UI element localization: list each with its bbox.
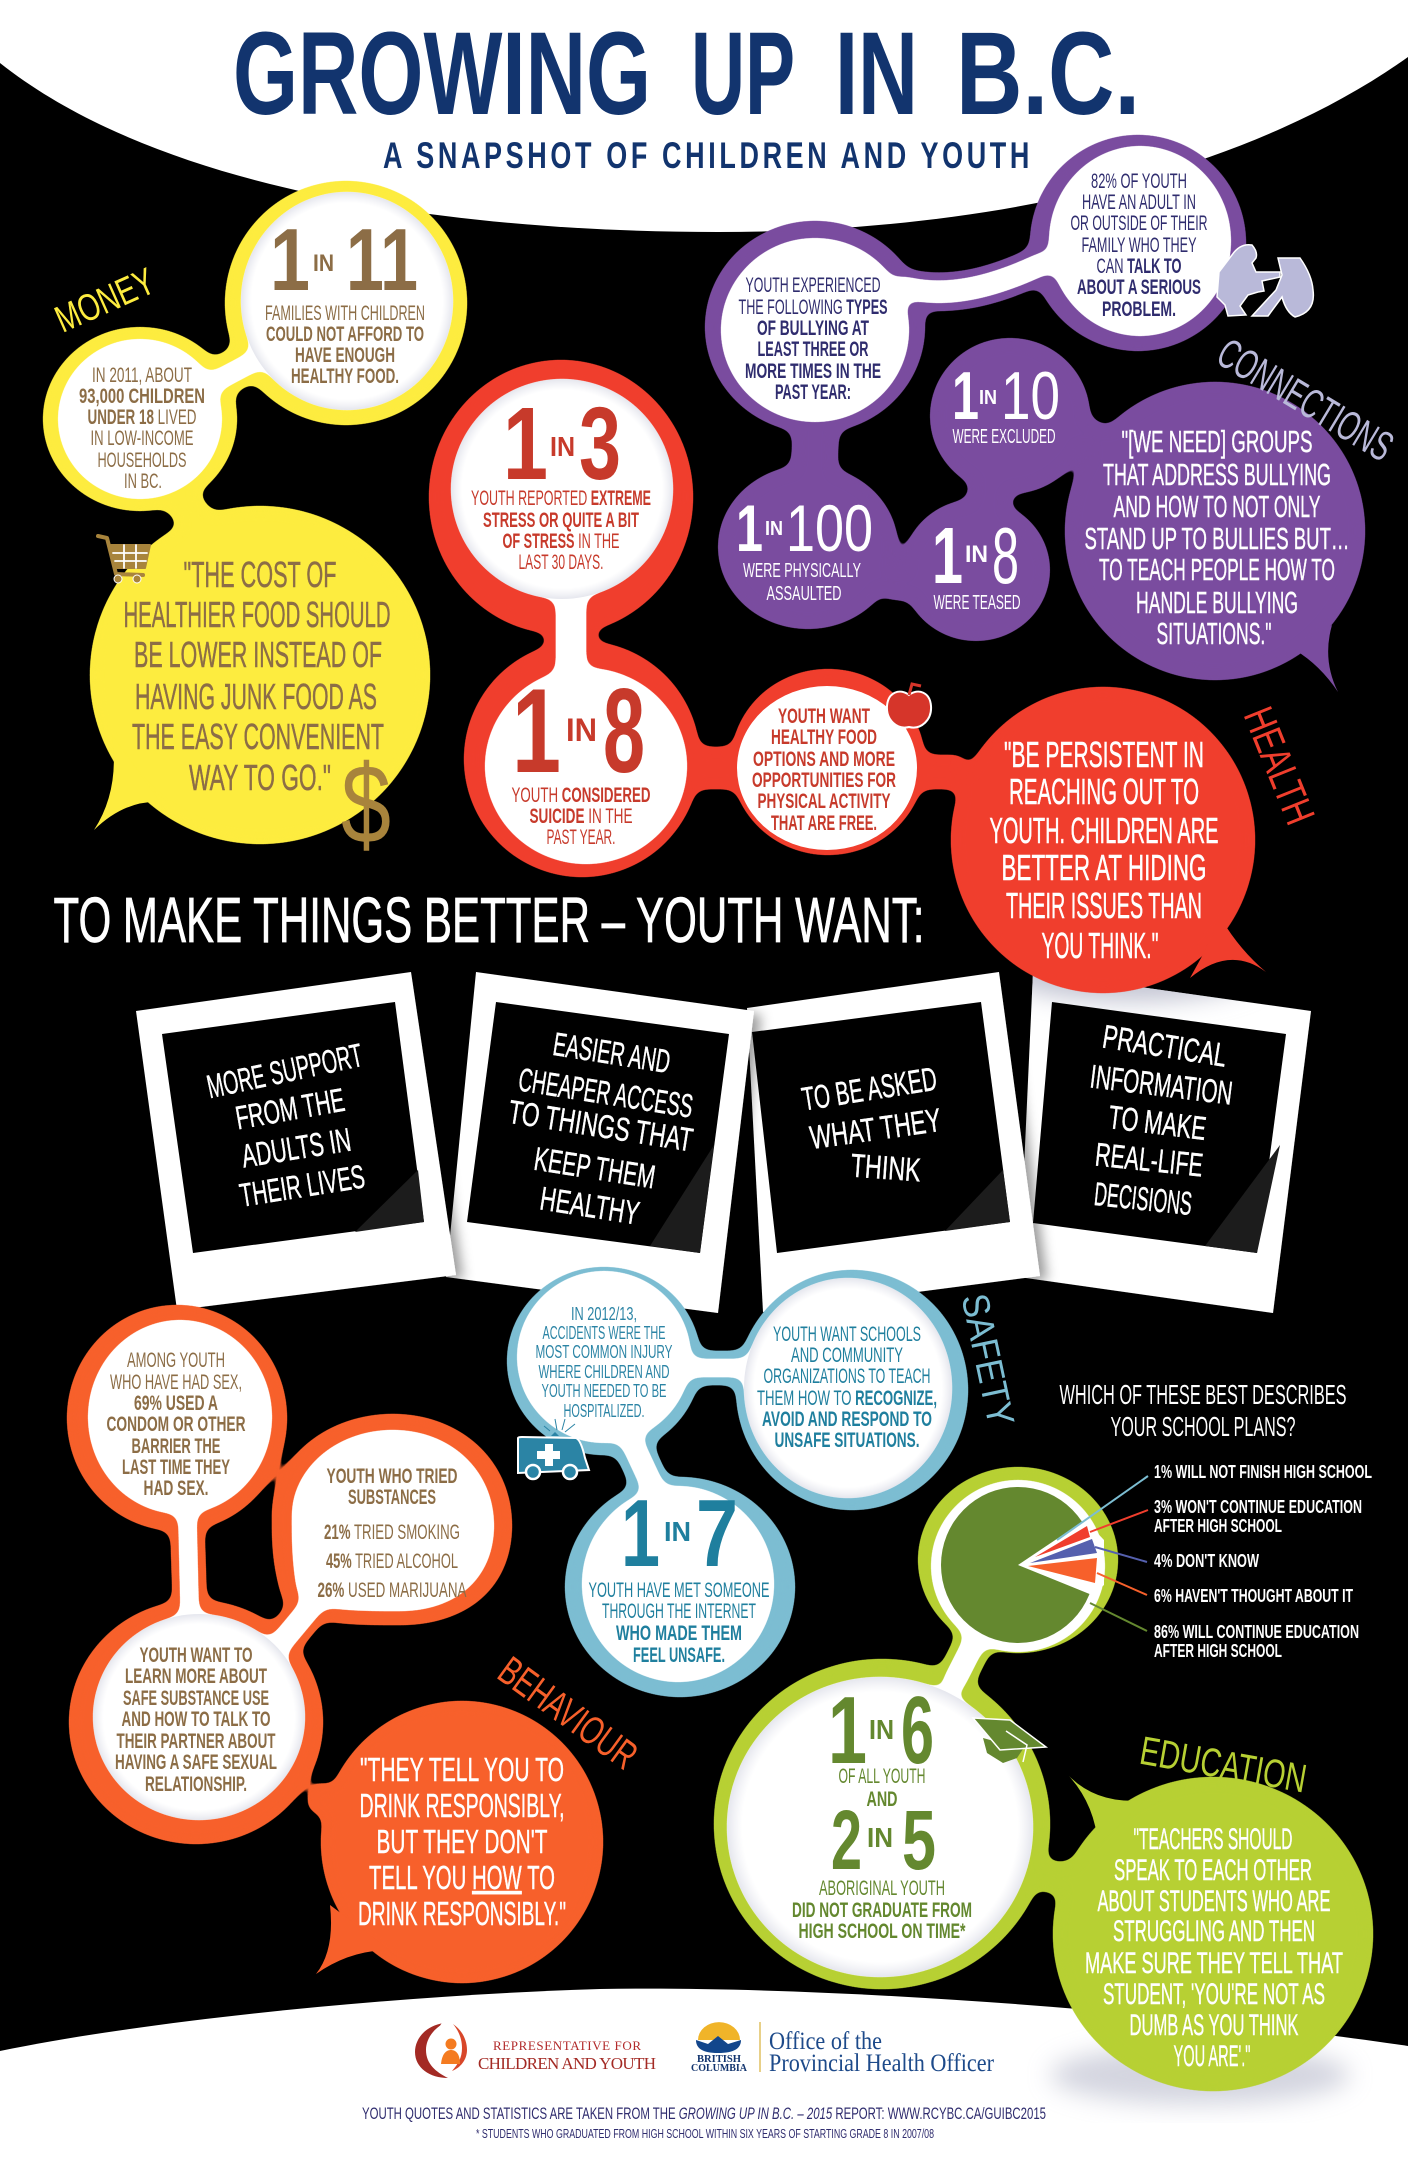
logo: representative for children and youth: REPRESENTATIVE FOR [493,2038,641,2053]
polaroid 2: CHEAPER ACCESS [516,1061,696,1125]
title: GROWING [233,8,651,140]
polaroid 4: REAL-LIFE [1094,1136,1205,1184]
money bubble base [43,181,467,844]
safety bubble base [507,1267,968,1697]
text: youth want healthy food: OPTIONS AND MORE [753,748,895,771]
stat: 1 in 100 assaulted: 100 [786,491,873,565]
behaviour label: BEHAVIOUR [490,1649,645,1778]
text: 93,000 children [79,364,205,493]
text: 82% of youth: PROBLEM. [1102,298,1176,321]
text: safe substance use: YOUTH WANT TO [140,1644,252,1667]
stat: 1 in 7: 1 [621,1480,660,1587]
text: safe substance use: RELATIONSHIP. [145,1773,247,1796]
text: condom use: AMONG YOUTH [127,1349,225,1372]
heading: to make things better: TO MAKE THINGS BETTER – YOUTH WANT: [54,884,924,956]
text: schools and community: AND COMMUNITY [791,1344,903,1367]
stat: 1 in 8 teased: 8 [992,511,1019,600]
icon: shopping cart [98,536,150,583]
stat: 1 in 8 teased: 1 [932,511,963,600]
stat: 1 in 6 and 2 in 5: OF ALL YOUTH [838,1765,926,1788]
text: types of bullying: YOUTH EXPERIENCED [746,274,880,297]
stat: 1 in 11: FAMILIES WITH CHILDREN [265,302,425,325]
polaroid 1: FROM THE [233,1081,347,1136]
text: schools and community: UNSAFE SITUATIONS. [774,1429,920,1452]
logo: representative for children and youth: CHILDREN AND YOUTH [478,2054,656,2073]
text: schools and community: AVOID AND RESPOND TO [762,1408,932,1431]
connections quote tail [1295,625,1338,692]
text: condom use: WHO HAVE HAD SEX, [110,1371,242,1394]
polaroid 2: TO THINGS THAT [506,1093,696,1158]
panel: health bubbles [429,360,1324,993]
stat: 1 in 8 suicide: 1 [512,664,561,798]
stat: 1 in 100 assaulted: WERE PHYSICALLY [743,560,861,582]
education bubble base [714,1467,1373,2091]
text: types of bullying: LEAST THREE OR [758,338,868,361]
panel: connections [705,135,1402,692]
panel: safety [507,1267,1021,1697]
pie chart: school plans [941,1476,1148,1643]
text: substances: SUBSTANCES [348,1486,436,1509]
stat: 1 in 10 excluded: IN [979,387,997,409]
stat: 1 in 11: COULD NOT AFFORD TO [266,323,424,346]
text: 93,000 children: 93,000 CHILDREN [79,385,205,408]
text: 82% of youth: HAVE AN ADULT IN [1082,191,1196,214]
stat: 1 in 8 suicide: IN [566,712,597,748]
stat: 1 in 6 and 2 in 5 [792,1677,972,1943]
text: 93,000 children: IN LOW-INCOME [90,427,194,450]
stat: 1 in 8 suicide [512,664,650,849]
stat: 1 in 6 and 2 in 5: DID NOT GRADUATE FROM [792,1899,972,1922]
text: 93,000 children: HOUSEHOLDS [98,449,186,472]
polaroid 4: DECISIONS [1093,1175,1194,1222]
text: accidents [536,1304,672,1421]
text: accidents: WHERE CHILDREN AND [538,1362,670,1382]
behaviour quote text: "THEY TELL YOU TO [360,1751,564,1788]
health quote text: THEIR ISSUES THAN [1006,885,1202,926]
text: accidents: IN 2012/13, [571,1304,637,1324]
behaviour quote text: TELL YOU HOW TO [369,1859,555,1896]
stat: 1 in 6 and 2 in 5: AND [866,1788,898,1811]
text: types of bullying [738,274,888,404]
text: condom use [106,1349,246,1500]
logo: representative for children and youth [415,2022,656,2078]
polaroid 1: MORE SUPPORT [203,1036,366,1105]
stat: 1 in 3: LAST 30 DAYS. [518,551,604,574]
stat: 1 in 11: 11 [346,210,418,309]
title [233,8,1140,140]
text: condom use: CONDOM OR OTHER [106,1413,246,1436]
stat: 1 in 11: 1 [270,210,310,309]
health quote text: YOUTH. CHILDREN ARE [990,810,1218,851]
icon: dollar sign: $ [341,742,391,867]
stat: 1 in 11 [265,210,425,388]
polaroid 4: INFORMATION [1088,1058,1235,1112]
text: condom use: HAD SEX. [144,1477,208,1500]
panel: education [714,1379,1373,2105]
stat: 1 in 3: 1 [503,386,548,501]
white circle: youth want [737,686,917,850]
health quote text: REACHING OUT TO [1009,771,1199,812]
icon: ambulance [518,1419,589,1479]
text: condom use: LAST TIME THEY [122,1456,230,1479]
stat: 1 in 7: THROUGH THE INTERNET [602,1600,756,1623]
text: types of bullying: OF BULLYING AT [757,317,869,340]
stat: 1 in 8 suicide: YOUTH CONSIDERED [512,784,650,807]
behaviour white circles [88,1320,494,1820]
text: 82% of youth: ABOUT A SERIOUS [1077,276,1201,299]
polaroid 2: EASIER AND [551,1025,673,1080]
polaroid 4: PRACTICAL [1100,1018,1229,1074]
polaroid 2: HEALTHY [538,1180,642,1232]
polaroid 4: TO MAKE [1107,1098,1208,1147]
stat: 1 in 3: YOUTH REPORTED EXTREME [471,487,651,510]
behaviour quote text: DRINK RESPONSIBLY, [360,1787,564,1824]
panel: behaviour [67,1305,645,1983]
stat: 1 in 100 assaulted: ASSAULTED [766,583,842,605]
stat: 1 in 6 and 2 in 5: ABORIGINAL YOUTH [819,1877,945,1900]
money quote text: BE LOWER INSTEAD OF [134,634,382,675]
text: youth want healthy food: HEALTHY FOOD [771,726,877,749]
stat: 1 in 11: IN [313,250,334,277]
logo: british columbia: BRITISH [697,2053,741,2065]
logo: british columbia [691,2022,747,2074]
stat: 1 in 100 assaulted: IN [765,518,783,540]
safety label: SAFETY [953,1290,1021,1430]
money quote tail [94,735,160,830]
stat: 1 in 7: YOUTH HAVE MET SOMEONE [588,1579,770,1602]
health quote tail [1190,920,1266,978]
connections quote text [1084,424,1350,651]
footer source note: YOUTH QUOTES AND STATISTICS ARE TAKEN FROM THE GROWING UP IN B.C. – 2015 REPORT: WWW.RCYBC.CA/GUIBC2015 [362,2104,1046,2123]
header white arc [0,0,1408,232]
connections bubble base [705,135,1365,680]
stat: 1 in 7: WHO MADE THEM [616,1622,742,1645]
stat: 1 in 10 excluded: 10 [1001,358,1060,434]
education label: EDUCATION [1137,1729,1310,1801]
stat: 1 in 10 excluded: WERE EXCLUDED [952,426,1056,448]
health quote text: YOU THINK." [1042,925,1158,966]
behaviour quote text: DRINK RESPONSIBLY." [358,1895,566,1932]
health quote text: "BE PERSISTENT IN [1004,734,1204,775]
text: safe substance use: AND HOW TO TALK TO [122,1708,270,1731]
stat: 1 in 6 and 2 in 5: 6 [901,1677,934,1784]
chart legend: AFTER HIGH SCHOOL [1154,1641,1282,1661]
text: accidents: HOSPITALIZED. [564,1401,644,1421]
text: 93,000 children: IN 2011, ABOUT [92,364,192,387]
text: types of bullying: MORE TIMES IN THE [745,360,881,383]
logo: office of the provincial health officer [760,2022,995,2077]
stat: 1 in 7: FEEL UNSAFE. [633,1644,725,1667]
polaroid 1: THEIR LIVES [237,1158,367,1214]
text: 82% of youth: FAMILY WHO THEY [1082,234,1196,257]
money quote text: HEALTHIER FOOD SHOULD [124,594,390,635]
text: substances [318,1465,466,1602]
title: UP [691,8,795,140]
text: types of bullying: THE FOLLOWING TYPES [738,296,888,319]
logo: office of the provincial health officer: Office of the [769,2028,882,2055]
education white circles [727,1480,1105,1977]
polaroid 4 [1024,976,1311,1313]
polaroid 1: ADULTS IN [239,1121,353,1175]
money quote text [124,554,390,798]
stat: 1 in 6 and 2 in 5: 1 [828,1677,867,1784]
stat: 1 in 10 excluded [952,358,1060,448]
text: accidents: MOST COMMON INJURY [536,1342,672,1362]
stat: 1 in 11: HEALTHY FOOD. [291,365,399,388]
health label: HEALTH [1235,700,1324,831]
text: 82% of youth: CAN TALK TO [1096,255,1182,278]
panel: polaroids [136,938,1311,1313]
icon: graduation cap [973,1718,1046,1763]
chart question [1060,1379,1346,1442]
subtitle: A SNAPSHOT OF CHILDREN AND YOUTH [383,135,1033,176]
stat: 1 in 6 and 2 in 5: 5 [902,1793,936,1887]
text: 82% of youth: 82% OF YOUTH [1091,170,1187,193]
stat: 1 in 7: IN [664,1516,691,1547]
health bubble base [429,360,1255,993]
text: schools and community [757,1323,937,1452]
shadow under education quote [1050,2045,1350,2105]
connections quote text: SITUATIONS." [1156,616,1272,651]
education quote text: YOU ARE'." [1174,2040,1250,2073]
stat: 1 in 8 suicide: PAST YEAR. [546,826,616,849]
stat: 1 in 8 teased [932,511,1020,614]
money quote text: HAVING JUNK FOOD AS [135,676,377,717]
icon: two people talking [1217,245,1313,317]
stat: 1 in 6 and 2 in 5: IN [867,1822,893,1853]
polaroid 3: THINK [850,1147,922,1188]
polaroid 3: WHAT THEY [807,1101,943,1156]
stat: 1 in 6 and 2 in 5: 2 [831,1793,862,1887]
text: types of bullying: PAST YEAR: [775,381,851,404]
stat: 1 in 100 assaulted: 1 [736,491,763,565]
connections white circles [721,146,1231,422]
panel: money [43,181,467,867]
polaroid 3: TO BE ASKED [799,1060,939,1118]
logo: office of the provincial health officer: Provincial Health Officer [769,2050,995,2077]
text: 82% of youth [1070,170,1208,321]
money white circles [58,192,453,499]
text: youth want healthy food: THAT ARE FREE. [771,812,877,835]
stat: 1 in 8 teased: IN [965,541,988,568]
stat: 1 in 11: HAVE ENOUGH [295,344,395,367]
education quote tail [1069,1776,1145,1845]
behaviour bubble base [67,1305,603,1983]
stat: 1 in 8 teased: WERE TEASED [934,592,1020,614]
chart legend [1154,1462,1372,1661]
polaroid 1 [136,972,456,1310]
stat: 1 in 3: OF STRESS IN THE [502,530,620,553]
text: substances: 26% USED MARIJUANA [318,1579,466,1602]
text: safe substance use [115,1644,277,1796]
polaroid 2: KEEP THEM [532,1140,658,1195]
money label: MONEY [49,261,161,341]
stat: 1 in 7: 7 [696,1480,738,1587]
health quote text: BETTER AT HIDING [1002,847,1206,888]
stat: 1 in 10 excluded: 1 [952,358,979,434]
text: safe substance use: HAVING A SAFE SEXUAL [115,1751,277,1774]
stat: 1 in 3: 3 [579,386,621,501]
footnote: * STUDENTS WHO GRADUATED FROM HIGH SCHOOL WITHIN SIX YEARS OF STARTING GRADE 8 IN 2007/08 [476,2126,934,2141]
text: safe substance use: SAFE SUBSTANCE USE [123,1687,269,1710]
text: youth want healthy food [752,705,896,835]
stat: 1 in 8 suicide: 8 [603,664,645,798]
text: schools and community: THEM HOW TO RECOGNIZE, [757,1387,937,1410]
text: substances: 45% TRIED ALCOHOL [326,1550,458,1573]
stat: 1 in 3: IN [550,431,575,462]
health white circles [451,379,687,864]
text: substances: 21% TRIED SMOKING [324,1521,460,1544]
text: youth want healthy food: OPPORTUNITIES FOR [752,769,896,792]
polaroid 3 [747,972,1040,1312]
money quote text: WAY TO GO." [189,757,331,798]
stat: 1 in 7 [588,1480,770,1667]
money quote text: THE EASY CONVENIENT [132,716,384,757]
footer white arc [0,1989,1408,2176]
education quote text [1085,1823,1343,2073]
stat: 1 in 6 and 2 in 5: HIGH SCHOOL ON TIME* [798,1920,966,1943]
title: IN [835,8,918,140]
title: B.C. [956,8,1140,140]
behaviour quote tail [316,1905,390,1974]
text: youth want healthy food: YOUTH WANT [778,705,870,728]
text: substances: YOUTH WHO TRIED [326,1465,458,1488]
text: 82% of youth: OR OUTSIDE OF THEIR [1070,212,1208,235]
stat: 1 in 3: STRESS OR QUITE A BIT [483,509,639,532]
text: 93,000 children: IN BC. [124,470,162,493]
health quote text [990,734,1218,966]
text: schools and community: YOUTH WANT SCHOOLS [773,1323,921,1346]
logo: british columbia: COLUMBIA [691,2062,747,2074]
text: condom use: BARRIER THE [132,1435,220,1458]
text: 93,000 children: UNDER 18 LIVED [88,406,196,429]
behaviour quote text: BUT THEY DON'T [376,1823,548,1860]
stat: 1 in 6 and 2 in 5: IN [869,1714,894,1745]
chart legend: 4% DON'T KNOW [1154,1551,1259,1571]
text: youth want healthy food: PHYSICAL ACTIVITY [758,790,890,813]
text: accidents: YOUTH NEEDED TO BE [542,1381,666,1401]
text: condom use: 69% USED A [134,1392,218,1415]
text: safe substance use: LEARN MORE ABOUT [125,1665,267,1688]
chart legend: AFTER HIGH SCHOOL [1154,1516,1282,1536]
stat: 1 in 3 [471,386,651,574]
polaroid 2 [446,972,754,1313]
icon: apple [887,684,931,728]
stat: 1 in 8 suicide: SUICIDE IN THE [530,805,632,828]
text: schools and community: ORGANIZATIONS TO TEACH [764,1365,930,1388]
text: safe substance use: THEIR PARTNER ABOUT [116,1730,276,1753]
money quote text: "THE COST OF [184,554,336,595]
text: accidents: ACCIDENTS WERE THE [542,1323,666,1343]
stat: 1 in 100 assaulted [736,491,873,605]
behaviour quote text [358,1751,566,1932]
safety white circles [517,1271,952,1682]
